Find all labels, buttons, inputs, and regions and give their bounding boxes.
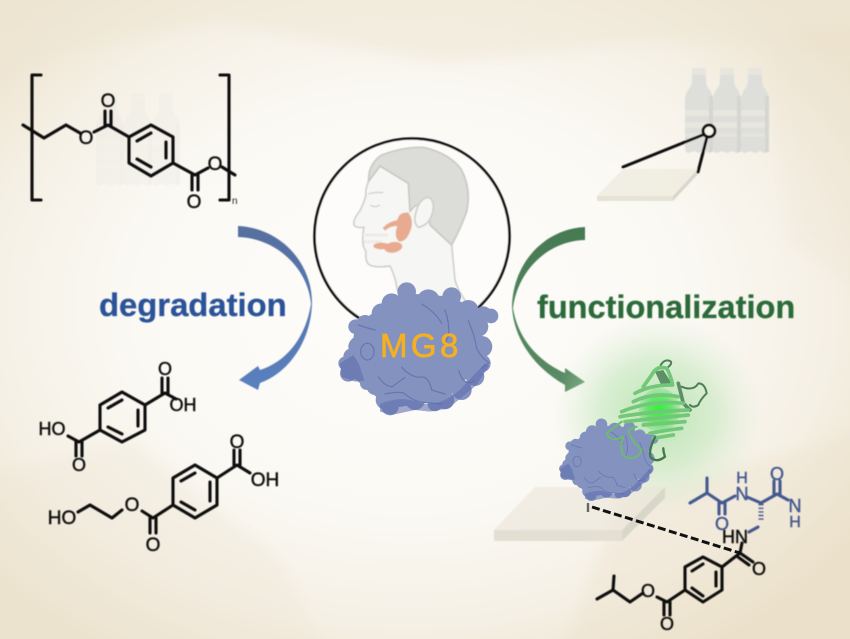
dashed linker [592, 507, 740, 553]
heading: functionalization: functionalization [537, 289, 795, 325]
faint bottles behind polymer [96, 93, 180, 186]
circle [314, 138, 510, 334]
peptide residue: O [770, 464, 784, 484]
product: MHET: O [230, 432, 244, 453]
PET polymer structure: n [232, 196, 238, 207]
head illustration [354, 147, 473, 310]
arrow: functionalization [512, 227, 585, 392]
peptide residue [690, 464, 802, 534]
product: MHET: HO [48, 508, 76, 529]
green fluorescent protein [607, 360, 707, 460]
PET fragment bound to serine [597, 527, 766, 634]
peptide residue: H [789, 514, 801, 531]
peptide residue: N [736, 484, 748, 504]
linker stem [587, 503, 589, 512]
product: MHET: O [125, 495, 139, 516]
PET polymer structure [23, 75, 238, 213]
ear [415, 197, 433, 227]
icon: bottles, tether and plate [597, 68, 769, 201]
arrow: degradation [238, 226, 312, 390]
green fluorescence glow [552, 315, 762, 515]
functionalized assembly [494, 315, 762, 553]
PET fragment bound to serine: O [752, 559, 766, 579]
product: terephthalic acid: OH [170, 395, 196, 415]
PET fragment bound to serine: HN [722, 527, 748, 547]
product: MHET: OH [251, 470, 279, 491]
circle with head illustration [314, 138, 510, 334]
product: MHET: O [146, 535, 160, 556]
hair [368, 147, 468, 245]
PET fragment bound to serine: O [660, 614, 674, 634]
peptide residue: O [715, 514, 729, 534]
heading: degradation: degradation [99, 286, 287, 323]
product: MHET [48, 432, 279, 556]
PET fragment bound to serine: O [641, 581, 655, 601]
PET polymer structure: O [101, 91, 115, 112]
immobilised protein surface [559, 418, 658, 501]
teeth [363, 235, 388, 242]
peptide residue: N [788, 496, 802, 516]
PET polymer structure: O [79, 128, 93, 149]
PET polymer structure: O [187, 192, 201, 213]
peptide residue: H [736, 470, 748, 487]
product: terephthalic acid: O [158, 359, 172, 379]
eye and brow [368, 192, 383, 207]
MG8 protein surface [338, 282, 498, 415]
product: terephthalic acid [38, 359, 196, 475]
salivary glands [373, 213, 412, 254]
label MG8: MG8 [380, 327, 462, 364]
face and neck [354, 166, 473, 310]
product: terephthalic acid: HO [38, 419, 66, 439]
product: terephthalic acid: O [72, 455, 86, 475]
PET polymer structure: O [208, 154, 222, 175]
plate [494, 487, 665, 541]
